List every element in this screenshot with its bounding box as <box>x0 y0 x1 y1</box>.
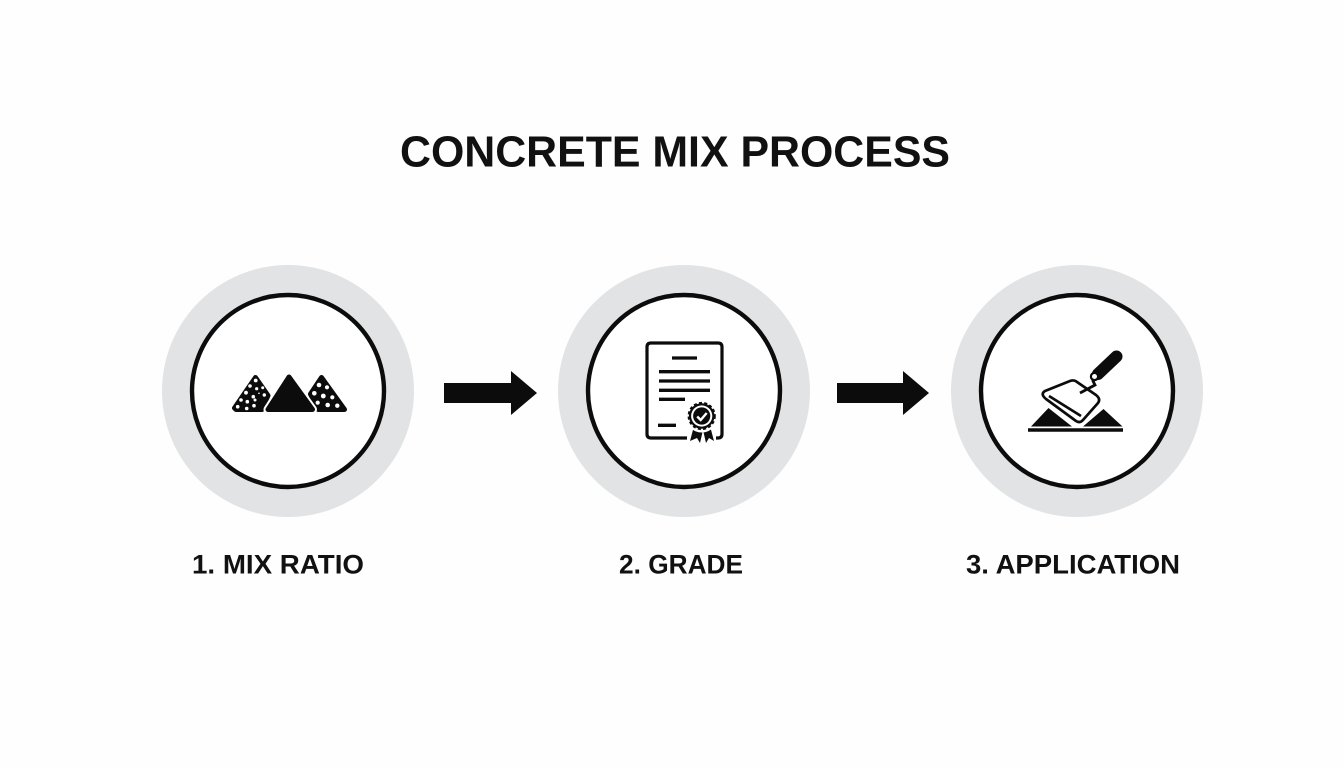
arrow 1 <box>444 371 537 415</box>
step 2: grade <box>558 265 810 580</box>
step 3: application <box>951 265 1203 580</box>
step 3 label: 3. APPLICATION <box>966 550 1180 580</box>
icon: certificate with seal <box>647 343 722 443</box>
title: CONCRETE MIX PROCESS <box>400 128 950 176</box>
step 2 circle <box>558 265 810 517</box>
arrow 2 <box>837 371 929 415</box>
icon: trowel on pile <box>1028 356 1123 430</box>
step 3 circle <box>951 265 1203 517</box>
step 2 label: 2. GRADE <box>619 550 743 580</box>
step 1: mix ratio <box>162 265 414 580</box>
step 1 label: 1. MIX RATIO <box>192 550 364 580</box>
step 1 circle <box>162 265 414 517</box>
icon: aggregate piles <box>234 377 344 410</box>
